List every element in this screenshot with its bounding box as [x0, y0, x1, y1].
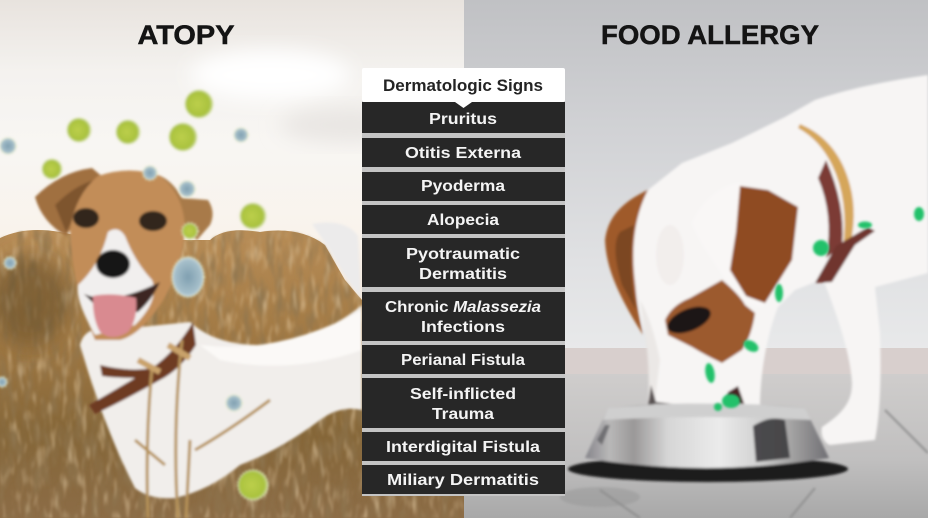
- row: pruritus: [362, 102, 565, 133]
- row: miliary dermatitis: Miliary Dermatitis: [387, 472, 539, 489]
- row: pyoderma: [362, 172, 565, 201]
- dog mouth: [84, 282, 160, 312]
- table header: Dermatologic Signs: [383, 77, 543, 95]
- mouth and nose: [648, 385, 675, 406]
- eye patch: [665, 280, 755, 363]
- row: self-inflicted trauma: [362, 378, 565, 428]
- dog right ear: [158, 175, 213, 240]
- row: otitis externa: Otitis Externa: [405, 145, 521, 162]
- green food particles: [704, 207, 924, 411]
- food bowl: [568, 456, 848, 482]
- row: perianal fistula: [362, 345, 565, 374]
- dog left ear: [35, 168, 104, 236]
- row: interdigital fistula: Interdigital Fistula: [386, 439, 540, 456]
- foreground straw: [135, 340, 270, 518]
- heading: food allergy: FOOD ALLERGY: [601, 20, 819, 50]
- row: chronic malassezia infections: [362, 292, 565, 341]
- row: chronic malassezia infections: Infections: [421, 319, 505, 336]
- row: pyotraumatic dermatitis: [362, 238, 565, 287]
- row: alopecia: [362, 205, 565, 234]
- photo: atopy dog in grass field: [0, 0, 464, 518]
- dog body: [633, 75, 928, 445]
- row: otitis externa: [362, 138, 565, 167]
- table header: [362, 68, 565, 102]
- row: alopecia: Alopecia: [427, 212, 499, 229]
- collar: [798, 124, 854, 250]
- row: chronic malassezia infections: Chronic Malassezia: [385, 299, 541, 316]
- row: pyotraumatic dermatitis: Dermatitis: [419, 266, 507, 283]
- near ear: [692, 183, 798, 307]
- allergen particles: [0, 90, 268, 500]
- row: interdigital fistula: [362, 432, 565, 461]
- tail: [312, 222, 361, 298]
- row: perianal fistula: Perianal Fistula: [401, 352, 525, 369]
- row: self-inflicted trauma: Trauma: [432, 406, 494, 423]
- row: pyoderma: Pyoderma: [421, 178, 505, 195]
- heading: atopy: ATOPY: [138, 20, 234, 50]
- dog head: [70, 170, 185, 340]
- row: pyotraumatic dermatitis: Pyotraumatic: [406, 246, 520, 263]
- photo: food allergy dog eating from bowl: [464, 0, 928, 518]
- far ear: [605, 188, 652, 335]
- panel: dermatologic signs table: [362, 68, 565, 496]
- dog collar: [89, 322, 196, 414]
- row: pruritus: Pruritus: [429, 111, 497, 128]
- row: miliary dermatitis: [362, 465, 565, 494]
- row: self-inflicted trauma: Self-inflicted: [410, 386, 516, 403]
- dog body: [80, 305, 362, 498]
